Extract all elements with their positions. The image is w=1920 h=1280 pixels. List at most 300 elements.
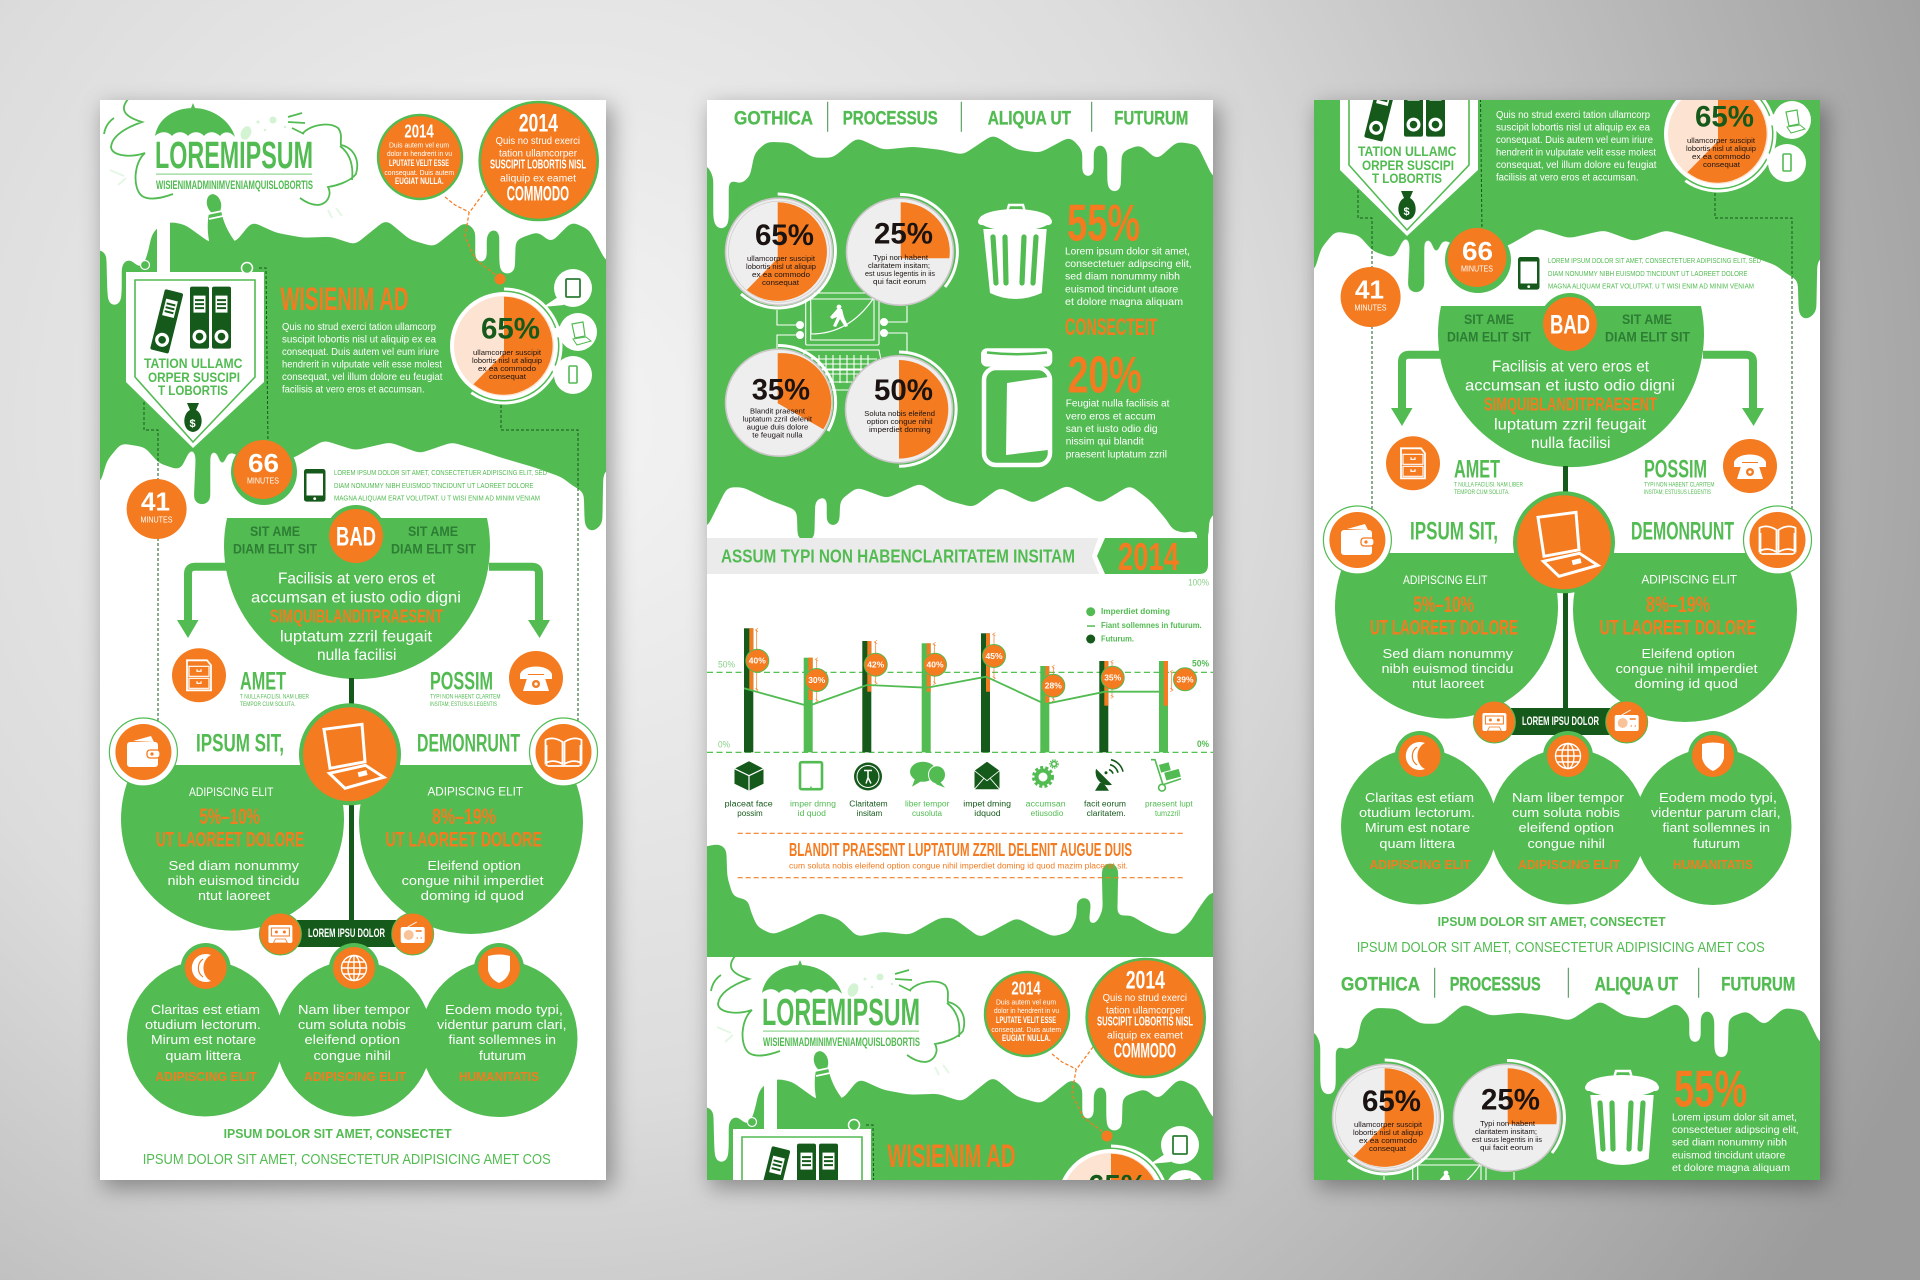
- callout: large 2014 circle: 2014: [519, 110, 558, 138]
- bar chart: 30%: [808, 675, 826, 685]
- panel: claritas: ADIPISCING ELIT: [155, 1070, 257, 1084]
- stat: 20%: praesent luptatum zzril: [1066, 448, 1167, 460]
- chart: pie 65: ullamcorper suscipit: [1354, 1120, 1423, 1129]
- panel: poster 3: [1294, 0, 1840, 1266]
- chart: pie 65: consequat: [762, 278, 800, 287]
- panel: nam liber: congue nihil: [314, 1048, 391, 1063]
- banner: lorem ipsu dolor: LOREM IPSU DOLOR: [308, 928, 385, 940]
- text block: intro: facilisis at vero eros et accumsan.: [282, 385, 425, 396]
- icon labels: id quod: [798, 809, 826, 818]
- callout: 66 minutes: 66: [248, 448, 279, 478]
- bar chart: 100%: [1188, 578, 1209, 588]
- panel: left circle: 5%–10%: [200, 804, 260, 829]
- callout: large 2014 circle: SUSCIPIT LOBORTIS NISL: [1097, 1014, 1193, 1029]
- legend: Futurum.: [1101, 635, 1134, 644]
- panel: eodem: [420, 943, 578, 1117]
- panel: right circle: [359, 765, 583, 934]
- item: possim: POSSIM: [430, 667, 493, 695]
- panel: eodem: HUMANITATIS: [1673, 858, 1753, 872]
- navigation: [1341, 968, 1795, 998]
- chart: pie 50: Soluta nobis eleifend: [864, 409, 935, 418]
- shadows: [103, 106, 1827, 1188]
- panel: claritas: [127, 943, 283, 1116]
- item: amet: T NULLA FACILISI. NAM LIBER: [240, 695, 310, 701]
- callout: small 2014 circle: LPUTATE VELIT ESSE: [996, 1015, 1056, 1026]
- navigation: PROCESSUS: [843, 108, 938, 129]
- chart: 65% donut: 65%: [481, 312, 540, 345]
- arrows: [177, 567, 550, 638]
- text block: intro: facilisis at vero eros et accumsan.: [1496, 173, 1639, 184]
- slime bands: [687, 135, 1233, 977]
- callout: large 2014 circle: Quis no strud exerci: [1103, 993, 1187, 1004]
- panel: bad semicircle: accumsan et iusto odio digni: [251, 590, 461, 607]
- panel: bad semicircle: Facilisis at vero eros et: [1492, 358, 1650, 375]
- icon labels: accumsan: [1026, 800, 1066, 809]
- item: possim: INSITAM; ESTUSUS LEGENTIS: [1644, 490, 1711, 496]
- icon: jar: [981, 348, 1052, 465]
- slime band: [1294, 1001, 1840, 1266]
- panel: claritas: [1341, 731, 1497, 904]
- callout: large 2014 circle: COMMODO: [1114, 1040, 1176, 1063]
- text block: phone note: LOREM IPSUM DOLOR SIT AMET, CONSECTETUER ADIPISCING ELIT, SED: [334, 468, 547, 477]
- badge: binders pennant: ORPER SUSCIPI: [1362, 157, 1454, 173]
- stat: 55%: Lorem ipsum dolor sit amet,: [1672, 1111, 1797, 1123]
- panel: eodem: Eodem modo typi,: [445, 1002, 563, 1017]
- panel: left circle: [121, 765, 344, 931]
- panel: claritas: quam littera: [165, 1048, 242, 1063]
- stat: 20%: 20%: [1068, 347, 1142, 405]
- chart: pie 25: qui facit eorum: [873, 277, 926, 286]
- panel: nam liber: [276, 943, 432, 1116]
- chart: pie 25: est usus legentis in iis: [865, 269, 935, 278]
- panel: claritas: Claritas est etiam: [1365, 790, 1474, 805]
- icon: book: [530, 718, 598, 786]
- panel: bad semicircle: nulla facilisi: [1531, 435, 1610, 452]
- panel: claritas: ADIPISCING ELIT: [1369, 858, 1471, 872]
- panel: bad semicircle: SIMQUIBLANDITPRAESENT: [1484, 395, 1657, 415]
- badge: binders pennant: TATION ULLAMC: [1358, 143, 1456, 159]
- callout: 41 minutes: MINUTES: [1354, 303, 1387, 313]
- callout: 66 minutes: 66: [1462, 236, 1493, 266]
- callout: 41 minutes: [127, 479, 187, 539]
- stat: 55%: 55%: [1067, 195, 1140, 253]
- stat: 55%: [1065, 195, 1192, 308]
- stat: 55%: euismod tincidunt utaore: [1065, 283, 1178, 295]
- title logo: WISIENIMADMINIMVENIAMQUISLOBORTIS: [763, 1037, 920, 1049]
- orange dashed connector: [1052, 1047, 1107, 1135]
- panel: right circle: congue nihil imperdiet: [1616, 661, 1758, 676]
- icon labels: idquod: [974, 809, 1001, 818]
- chart: pie 35: luptatum zzril delenit: [743, 414, 813, 423]
- text block: phone note: DIAM NONUMMY NIBH EUISMOD TINCIDUNT UT LAOREET DOLORE: [1548, 269, 1748, 278]
- navigation: [734, 102, 1188, 132]
- text block: intro: [282, 322, 443, 396]
- chart: pie 35: [726, 345, 836, 456]
- text block: intro: hendrerit in vulputate velit esse molest: [282, 360, 442, 371]
- callout: small 2014 circle: 2014: [1011, 979, 1041, 999]
- panel: poster 2: [707, 100, 1213, 1180]
- text block: phone note: [1548, 256, 1761, 291]
- chart: pie 65: 65%: [755, 219, 814, 252]
- chart: 65% donut: lobortis nisl ut aliquip: [472, 356, 542, 365]
- icon: laptop: [1513, 491, 1615, 593]
- orange dot: [494, 274, 506, 284]
- icon: wallet: [109, 718, 177, 786]
- chart: pie 65: consequat: [1369, 1144, 1407, 1153]
- callout: 66 minutes: [1445, 227, 1511, 293]
- callout: small 2014 circle: EUGIAT NULLA.: [1002, 1033, 1051, 1044]
- chart: pie 35: Blandit praesent: [750, 406, 806, 415]
- text block: intro: [1496, 110, 1657, 184]
- panel: bad semicircle: BAD: [1550, 309, 1590, 339]
- chart: 65% donut: lobortis nisl ut aliquip: [1686, 144, 1756, 153]
- heading: ipsum sit: IPSUM SIT,: [1410, 518, 1498, 546]
- footer line: IPSUM DOLOR SIT AMET, CONSECTETUR ADIPISICING AMET COS: [143, 1151, 551, 1168]
- callout: 66 minutes: MINUTES: [247, 475, 279, 485]
- callout: 66 minutes: [231, 439, 297, 505]
- panel: bad semicircle: luptatum zzril feugait: [1494, 416, 1647, 433]
- bar chart: [707, 578, 1213, 752]
- panel: bad semicircle: SIT AME: [408, 523, 458, 539]
- chart: 65% donut: ex ea commodo: [1692, 152, 1750, 161]
- item: amet: [1386, 436, 1524, 496]
- icon labels: Claritatem: [849, 800, 888, 809]
- panel: eodem: HUMANITATIS: [459, 1070, 539, 1084]
- callout: large 2014 circle: COMMODO: [507, 183, 569, 206]
- slime band: [80, 193, 626, 531]
- stat: 20%: [1066, 347, 1169, 460]
- panel: bad semicircle: luptatum zzril feugait: [280, 628, 433, 645]
- icon: trash can: [1585, 1071, 1659, 1165]
- panel: eodem: Eodem modo typi,: [1659, 790, 1777, 805]
- dashed connector: [866, 1125, 874, 1267]
- panel: right circle: doming id quod: [421, 888, 524, 903]
- chart: 65% donut: 65%: [1088, 1169, 1147, 1202]
- text block: phone note: LOREM IPSUM DOLOR SIT AMET, CONSECTETUER ADIPISCING ELIT, SED: [1548, 256, 1761, 265]
- item: possim: INSITAM; ESTUSUS LEGENTIS: [430, 702, 497, 708]
- title logo: [711, 955, 964, 1075]
- item: amet: [172, 648, 310, 708]
- bar chart: 45%: [985, 651, 1003, 661]
- panel: right circle: UT LAOREET DOLORE: [386, 829, 542, 852]
- item: possim: [1644, 439, 1777, 496]
- badge: binders pennant: $: [190, 418, 196, 430]
- footer line: IPSUM DOLOR SIT AMET, CONSECTETUR ADIPISICING AMET COS: [1357, 939, 1765, 956]
- text block: intro: consequat. Duis autem vel eum iriure: [282, 347, 439, 358]
- text block: intro: hendrerit in vulputate velit esse molest: [1496, 148, 1656, 159]
- chart: 65% donut: [1059, 1126, 1204, 1260]
- chart: pie 25: est usus legentis in iis: [1472, 1135, 1542, 1144]
- text block: intro: consequat, vel illum dolore eu feugiat: [1496, 160, 1657, 171]
- footer bold: IPSUM DOLOR SIT AMET, CONSECTET: [224, 1126, 452, 1141]
- illustration: laptop: [1384, 1159, 1514, 1256]
- panel: right circle: congue nihil imperdiet: [402, 873, 544, 888]
- panel: poster 1: [80, 98, 626, 1180]
- callout: 41 minutes: [1341, 267, 1401, 327]
- navigation: GOTHICA: [734, 108, 813, 129]
- chart: pie 25: qui facit eorum: [1480, 1143, 1533, 1152]
- panel: bad semicircle: SIMQUIBLANDITPRAESENT: [270, 607, 443, 627]
- chart: 65% donut: [1666, 57, 1811, 191]
- chart: pie 25: Typi non habent: [873, 253, 929, 262]
- panel: claritas: Mirum est notare: [1365, 820, 1470, 835]
- chart: 65% donut: [452, 269, 597, 403]
- badge: binders pennant: ORPER SUSCIPI: [148, 369, 240, 385]
- navigation: FUTURUM: [1114, 108, 1188, 129]
- badge: binders pennant: $: [1404, 206, 1410, 218]
- icon: phone: [1518, 257, 1540, 290]
- stat: 55%: et dolore magna aliquam: [1672, 1162, 1790, 1174]
- chart: pie 35: te feugait nulla: [752, 430, 803, 439]
- chart: 65% donut: ex ea commodo: [478, 364, 536, 373]
- navigation: ALIQUA UT: [1595, 974, 1678, 995]
- icon labels: placeat face: [725, 800, 773, 809]
- panel: bad semicircle: SIT AME: [250, 523, 300, 539]
- chart: pie 25: claritatem insitam;: [1475, 1127, 1537, 1136]
- callout: small 2014 circle: LPUTATE VELIT ESSE: [389, 158, 449, 169]
- title logo: LOREMIPSUM: [155, 135, 313, 177]
- chart: pie 35: 35%: [752, 373, 810, 406]
- panel: bad semicircle: DIAM ELIT SIT: [1447, 328, 1531, 344]
- stem: [1563, 466, 1568, 500]
- panel: bad semicircle: Facilisis at vero eros et: [278, 570, 436, 587]
- panel: right circle: ADIPISCING ELIT: [1642, 574, 1737, 586]
- callout: blandit: cum soluta nobis eleifend option congue nihil imperdiet doming id quod mazim placerat sit.: [789, 860, 1128, 870]
- banner: lorem ipsu dolor: [1473, 701, 1648, 743]
- footer bold: IPSUM DOLOR SIT AMET, CONSECTET: [1438, 914, 1666, 929]
- stem lower inner: [1563, 588, 1568, 710]
- stat: 55%: sed diam nonummy nibh: [1065, 271, 1180, 283]
- item: possim: TYPI NON HABENT CLARITEM: [430, 695, 500, 701]
- panel: bad semicircle: DIAM ELIT SIT: [391, 540, 476, 556]
- panel: nam liber: eleifend option: [304, 1032, 400, 1047]
- title logo: [104, 98, 357, 218]
- panel: bad semicircle: accumsan et iusto odio digni: [1465, 378, 1675, 395]
- next page preview: [1294, 968, 1840, 1266]
- banner: lorem ipsu dolor: LOREM IPSU DOLOR: [1522, 716, 1599, 728]
- stem: [349, 678, 354, 704]
- panel: eodem: fiant sollemnes in: [1662, 820, 1770, 835]
- legend: Imperdiet doming: [1101, 607, 1170, 616]
- icon: book: [1744, 506, 1812, 574]
- panel: right circle: Eleifend option: [428, 858, 521, 873]
- callout: large 2014 circle: aliquip ex eamet: [500, 174, 576, 185]
- callout: small 2014 circle: consequat. Duis autem: [384, 168, 454, 177]
- chart: pie 25: 25%: [874, 217, 933, 250]
- bar chart: 35%: [1104, 673, 1122, 683]
- panel: eodem: [1634, 731, 1792, 905]
- panel: eodem: futurum: [479, 1048, 526, 1063]
- icon: laptop: [299, 703, 401, 805]
- icon labels: tumzzril: [1155, 809, 1180, 818]
- chart: pie 50: [846, 352, 956, 466]
- panel: bad semicircle: [224, 505, 490, 679]
- bar chart: 50%: [1192, 659, 1209, 669]
- banner: lorem ipsu dolor: [259, 913, 434, 955]
- callout: 66 minutes: MINUTES: [1461, 263, 1493, 273]
- panel: nam liber: cum soluta nobis: [298, 1017, 407, 1032]
- chart: pie 65: ex ea commodo: [1359, 1136, 1417, 1145]
- panel: left circle: nibh euismod tincidu: [168, 873, 300, 888]
- chart: pie 25: 25%: [1481, 1083, 1540, 1116]
- panel: claritas: Mirum est notare: [151, 1032, 256, 1047]
- heading: demonrunt: DEMONRUNT: [417, 730, 520, 758]
- panel: left circle: Sed diam nonummy: [168, 858, 300, 873]
- callout: small 2014 circle: Duis autem vel eum: [996, 997, 1056, 1006]
- panel: bad semicircle: DIAM ELIT SIT: [233, 540, 317, 556]
- panel: bad semicircle: SIT AME: [1464, 311, 1514, 327]
- text block: intro: consequat. Duis autem vel eum iriure: [1496, 135, 1653, 146]
- panel: nam liber: [1490, 731, 1646, 904]
- item: amet: AMET: [240, 667, 286, 695]
- panel: right circle: [1573, 553, 1797, 722]
- item: possim: [430, 651, 563, 708]
- item: amet: TEMPOR CUM SOLUTA.: [240, 702, 296, 708]
- icon: phone: [304, 469, 326, 502]
- stat: 55%: et dolore magna aliquam: [1065, 296, 1183, 308]
- stem lower: [1561, 592, 1570, 710]
- bar chart: 0%: [718, 740, 730, 750]
- callout: 41 minutes: MINUTES: [140, 515, 173, 525]
- callout: small 2014 circle: 2014: [404, 122, 434, 142]
- panel: nam liber: ADIPISCING ELIT: [1518, 858, 1620, 872]
- panel: eodem: fiant sollemnes in: [448, 1032, 556, 1047]
- main content: [1294, 0, 1840, 956]
- text block: phone note: MAGNA ALIQUAM ERAT VOLUTPAT. U T WISI ENIM AD MINIM VENIAM: [1548, 282, 1754, 291]
- item: possim: TYPI NON HABENT CLARITEM: [1644, 483, 1714, 489]
- panel: right circle: 8%–19%: [432, 804, 496, 829]
- bar chart: 42%: [867, 660, 885, 670]
- stat: 55%: consectetuer adipscing elit,: [1672, 1124, 1799, 1136]
- panel: left circle: UT LAOREET DOLORE: [1370, 617, 1518, 640]
- icon: trash can: [978, 205, 1052, 299]
- icon labels: cusoluta: [912, 809, 943, 818]
- stat: 55%: Lorem ipsum dolor sit amet,: [1065, 245, 1190, 257]
- stat: 55%: consectetuer adipscing elit,: [1065, 258, 1192, 270]
- text block: intro: suscipit lobortis nisl ut aliquip ex ea: [282, 335, 436, 346]
- text block: intro: Quis no strud exerci tation ullamcorp: [282, 322, 436, 333]
- bar chart: 39%: [1176, 674, 1194, 684]
- chart: pie 50: option congue nihil: [867, 417, 933, 426]
- callout: large 2014 circle: 2014: [1126, 967, 1165, 995]
- panel: right circle: 8%–19%: [1646, 592, 1710, 617]
- dashed connectors: [144, 268, 578, 730]
- panel: right circle: UT LAOREET DOLORE: [1600, 617, 1756, 640]
- chart: pie 65: [1332, 1060, 1442, 1174]
- icon labels: claritatem.: [1087, 809, 1126, 818]
- chart: pie 50: 50%: [874, 374, 933, 407]
- panel: left circle: nibh euismod tincidu: [1382, 661, 1514, 676]
- icon labels: imper dmng: [790, 800, 836, 809]
- panel: bad semicircle: SIT AME: [1622, 311, 1672, 327]
- navigation: PROCESSUS: [1450, 974, 1541, 995]
- chart: pie 25: Typi non habent: [1480, 1119, 1536, 1128]
- icon labels: praesent lupt: [1145, 800, 1193, 809]
- text block: phone note: [334, 468, 547, 503]
- item: amet: AMET: [1454, 455, 1500, 483]
- text block: intro: Quis no strud exerci tation ullamcorp: [1496, 110, 1650, 121]
- icon labels: possim: [737, 809, 763, 818]
- panel: bad semicircle: DIAM ELIT SIT: [1605, 328, 1690, 344]
- orange dashed connector: [445, 190, 500, 278]
- chart: pie 35: augue duis dolore: [747, 422, 808, 431]
- panel: claritas: otudium lectorum.: [145, 1017, 261, 1032]
- item: amet: T NULLA FACILISI. NAM LIBER: [1454, 483, 1524, 489]
- slime band: [1294, 0, 1840, 319]
- illustration: laptop: [777, 293, 907, 390]
- chart: pie 65: lobortis nisl ut aliquip: [1353, 1128, 1423, 1137]
- icon labels: insitam: [857, 809, 883, 818]
- navigation: ALIQUA UT: [988, 108, 1071, 129]
- stat: 20%: Feugiat nulla facilisis at: [1066, 398, 1169, 410]
- chart: pie 25: [846, 194, 957, 305]
- callout: small 2014 circle: EUGIAT NULLA.: [395, 176, 444, 187]
- panel: nam liber: eleifend option: [1518, 820, 1614, 835]
- panel: left circle: ADIPISCING ELIT: [189, 787, 274, 799]
- chart: pie 65: ullamcorper suscipit: [747, 254, 816, 263]
- panel: claritas: otudium lectorum.: [1359, 805, 1475, 820]
- callout: small 2014 circle: consequat. Duis autem: [991, 1025, 1061, 1034]
- callout: large 2014 circle: [480, 102, 598, 220]
- navigation: GOTHICA: [1341, 974, 1420, 995]
- panel: left circle: ntut laoreet: [198, 888, 270, 903]
- chart: pie 25: claritatem insitam;: [868, 261, 930, 270]
- bar chart: 50%: [718, 660, 735, 670]
- navigation: FUTURUM: [1721, 974, 1795, 995]
- callout: small 2014 circle: [378, 115, 462, 199]
- chart: pie 25: [1454, 1060, 1564, 1171]
- panel: left circle: Sed diam nonummy: [1382, 646, 1514, 661]
- stem lower inner: [349, 800, 354, 922]
- stat: 55%: euismod tincidunt utaore: [1672, 1149, 1785, 1161]
- chart: pie 65: [726, 194, 835, 308]
- text block: intro: consequat, vel illum dolore eu feugiat: [282, 372, 443, 383]
- legend: Fiant sollemnes in futurum.: [1101, 621, 1202, 630]
- panel: right circle: Eleifend option: [1642, 646, 1735, 661]
- text block: phone note: DIAM NONUMMY NIBH EUISMOD TINCIDUNT UT LAOREET DOLORE: [334, 481, 534, 490]
- callout: large 2014 circle: Quis no strud exerci: [496, 136, 580, 147]
- text block: phone note: MAGNA ALIQUAM ERAT VOLUTPAT. U T WISI ENIM AD MINIM VENIAM: [334, 494, 540, 503]
- icon labels: facit eorum: [1084, 800, 1126, 809]
- callout: 41 minutes: 41: [141, 487, 170, 517]
- icon row: [734, 760, 1181, 791]
- callout: blandit: [738, 833, 1183, 878]
- stat: 55%: 55%: [1674, 1061, 1747, 1119]
- stat: 20%: san et iusto odio dig: [1066, 423, 1158, 435]
- stat: 55%: [1672, 1061, 1799, 1174]
- heading: demonrunt: DEMONRUNT: [1631, 518, 1734, 546]
- panel: right circle: ADIPISCING ELIT: [428, 786, 523, 798]
- callout: small 2014 circle: dolor in hendrerit in vu: [994, 1006, 1059, 1015]
- stat: 20%: nissim qui blandit: [1066, 436, 1144, 448]
- panel: eodem: futurum: [1693, 836, 1740, 851]
- callout: large 2014 circle: aliquip ex eamet: [1107, 1031, 1183, 1042]
- title logo: WISIENIMADMINIMVENIAMQUISLOBORTIS: [156, 180, 313, 192]
- stat: 55%: sed diam nonummy nibh: [1672, 1137, 1787, 1149]
- heading: wisienim ad: WISIENIM AD: [280, 281, 408, 317]
- bar chart: 40%: [926, 660, 944, 670]
- next page preview: [687, 955, 1233, 1275]
- panel: claritas: Claritas est etiam: [151, 1002, 260, 1017]
- chart heading bar: 2014: [1118, 536, 1179, 579]
- callout: small 2014 circle: Duis autem vel eum: [389, 140, 449, 149]
- badge: binders pennant: [733, 1118, 871, 1275]
- chart: 65% donut: ullamcorper suscipit: [1687, 136, 1756, 145]
- slime band: [687, 1050, 1233, 1267]
- panel: claritas: quam littera: [1379, 836, 1456, 851]
- chart: 65% donut: ullamcorper suscipit: [473, 348, 542, 357]
- panel: nam liber: Nam liber tempor: [1512, 790, 1625, 805]
